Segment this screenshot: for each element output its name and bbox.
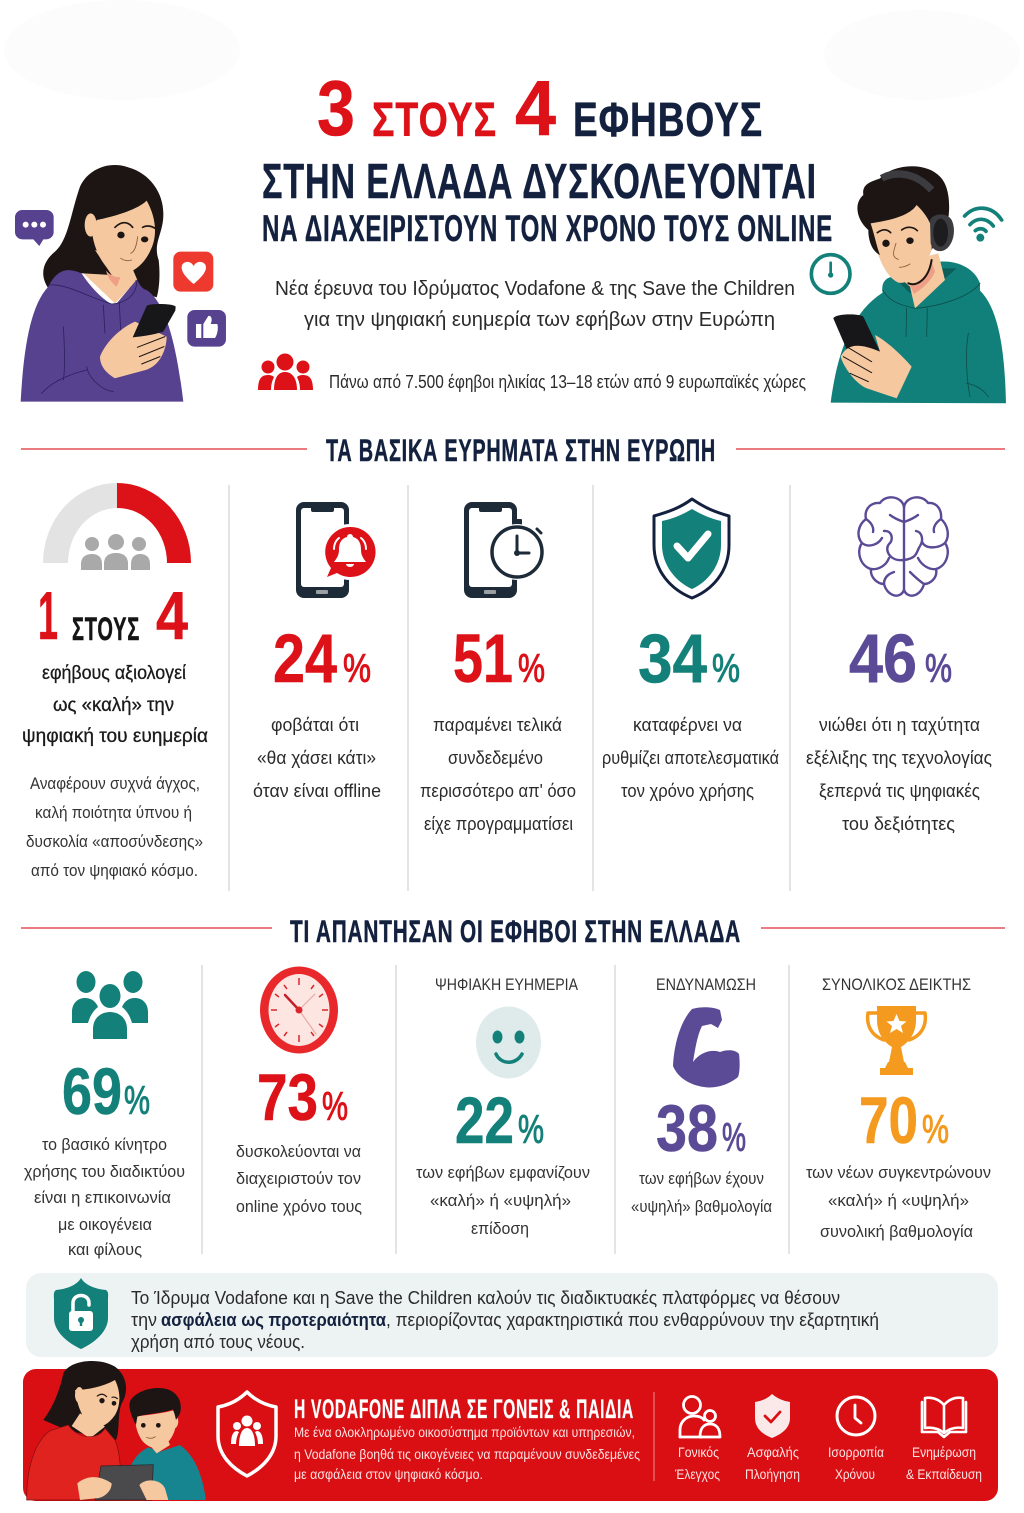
stat: 51 percent: 51	[453, 620, 513, 697]
item: safe browsing	[745, 1394, 800, 1482]
panel: 73 percent	[236, 966, 362, 1216]
panel: 46 percent	[806, 497, 992, 834]
heading: teens in Greece: ΤΙ ΑΠΑΝΤΗΣΑΝ ΟΙ ΕΦΗΒΟΙ ΣΤΗΝ ΕΛΛΑΔΑ	[290, 913, 741, 949]
text: 73 percent: διαχειριστούν τον	[236, 1169, 361, 1188]
text: 69 percent: και φίλους	[68, 1240, 142, 1259]
text: 46 percent: νιώθει ότι η ταχύτητα	[819, 715, 980, 735]
text: 1 in 4 lead: ως «καλή» την	[53, 695, 174, 716]
item: parental control: Έλεγχος	[674, 1466, 720, 1482]
title: 3	[317, 64, 355, 152]
text: 38 percent: «υψηλή» βαθμολογία	[631, 1197, 772, 1216]
text: 22 percent: «καλή» ή «υψηλή»	[430, 1191, 571, 1210]
icon: trophy	[868, 1006, 925, 1075]
text: 1 in 4 lead: εφήβους αξιολογεί	[42, 663, 187, 684]
panel: 69 percent	[24, 971, 185, 1259]
text: callout: ασφάλεια ως προτεραιότητα	[161, 1310, 386, 1330]
stat: 73 percent: %	[322, 1085, 348, 1129]
item: parental control: Γονικός	[678, 1444, 719, 1460]
callout: call to platforms	[26, 1273, 998, 1357]
icon: brain	[859, 497, 948, 596]
stat: 1 in 4	[38, 578, 188, 654]
text: 24 percent: φοβάται ότι	[271, 715, 359, 735]
text: 69 percent: χρήσης του διαδικτύου	[24, 1162, 185, 1181]
text: 24 percent	[253, 715, 381, 801]
text: 46 percent: ξεπερνά τις ψηφιακές	[819, 781, 980, 801]
stat: 34 percent: %	[712, 647, 740, 691]
text: 22 percent	[416, 1163, 590, 1238]
stat: 24 percent: 24	[273, 620, 337, 697]
icon: survey people	[258, 354, 313, 390]
stat: 46 percent: 46	[849, 620, 917, 697]
stat: 46 percent: %	[925, 647, 952, 691]
panel: 1 in 4	[22, 483, 208, 880]
gauge chart	[43, 483, 191, 570]
text: 1 in 4 details: δυσκολία «αποσύνδεσης»	[26, 832, 203, 851]
stat: 51 percent: %	[518, 647, 545, 691]
label: overall index: ΣΥΝΟΛΙΚΟΣ ΔΕΙΚΤΗΣ	[822, 975, 971, 994]
text: 1 in 4 details: καλή ποιότητα ύπνου ή	[35, 803, 192, 822]
text: banner body	[294, 1425, 640, 1482]
stat: 70 percent: 70	[859, 1083, 918, 1157]
heading: banner: Η VODAFONE ΔΙΠΛΑ ΣΕ ΓΟΝΕΙΣ & ΠΑΙΔΙΑ	[294, 1394, 634, 1424]
icon: muscle arm	[673, 1007, 740, 1087]
text: 51 percent: περισσότερο απ' όσο	[420, 781, 576, 801]
text: 51 percent	[420, 715, 576, 834]
title: ΕΦΗΒΟΥΣ	[573, 94, 763, 147]
stat: 1 in 4: ΣΤΟΥΣ	[72, 611, 140, 647]
text: callout	[131, 1288, 879, 1352]
text: 69 percent: με οικογένεια	[58, 1215, 152, 1234]
panel: 51 percent	[420, 502, 576, 834]
icon: phone with bell	[296, 502, 378, 598]
icon: lock shield	[54, 1278, 108, 1349]
label: digital wellbeing: ΨΗΦΙΑΚΗ ΕΥΗΜΕΡΙΑ	[435, 975, 579, 994]
panel: 24 percent	[253, 502, 381, 801]
text: 69 percent: το βασικό κίνητρο	[42, 1135, 167, 1154]
text: 69 percent	[24, 1135, 185, 1259]
item: time balance	[828, 1397, 884, 1482]
subtitle: Νέα έρευνα του Ιδρύματος Vodafone & της Save the Children	[275, 278, 795, 300]
text: banner body: η Vodafone βοηθά τις οικογένειες να παραμένουν συνδεδεμένες	[294, 1447, 640, 1462]
stat: 70 percent: %	[922, 1108, 949, 1152]
item: education	[906, 1398, 982, 1482]
icon: phone with stopwatch	[464, 502, 545, 598]
stat: 38 percent: %	[722, 1116, 746, 1160]
text: banner body: με ασφάλεια στον ψηφιακό κόσμο.	[294, 1467, 483, 1482]
title: 4	[515, 64, 556, 152]
item: education: & Εκπαίδευση	[906, 1466, 982, 1482]
text: banner body: Με ένα ολοκληρωμένο οικοσύστημα προϊόντων και υπηρεσιών,	[294, 1425, 635, 1440]
panel: 34 percent	[602, 499, 779, 801]
text: callout: , περιορίζοντας χαρακτηριστικά που ενθαρρύνουν την εξαρτητική	[386, 1310, 879, 1330]
text: 1 in 4 details	[26, 774, 203, 880]
heading: findings in Europe: ΤΑ ΒΑΣΙΚΑ ΕΥΡΗΜΑΤΑ ΣΤΗΝ ΕΥΡΩΠΗ	[326, 432, 716, 468]
stat: 22 percent: %	[518, 1108, 544, 1152]
subtitle: για την ψηφιακή ευημερία των εφήβων στην Ευρώπη	[304, 309, 775, 331]
stat: 38 percent: 38	[656, 1091, 718, 1165]
item: time balance: Χρόνου	[835, 1466, 875, 1482]
text: 34 percent: ρυθμίζει αποτελεσματικά	[602, 748, 779, 768]
text: 46 percent: εξέλιξης της τεχνολογίας	[806, 748, 992, 768]
text: 46 percent: του δεξιότητες	[842, 814, 955, 834]
item: safe browsing: Ασφαλής	[747, 1444, 799, 1460]
illustration: boy with headphones	[811, 166, 1006, 403]
text: 70 percent: «καλή» ή «υψηλή»	[828, 1191, 969, 1210]
text: 46 percent	[806, 715, 992, 834]
text: 70 percent	[806, 1163, 991, 1241]
illustration: girl with phone	[15, 165, 226, 402]
text: 1 in 4 details: από τον ψηφιακό κόσμο.	[31, 861, 198, 880]
text: 1 in 4 lead	[22, 663, 208, 747]
text: 38 percent	[631, 1169, 772, 1216]
icon: clock	[260, 966, 338, 1054]
text: 51 percent: συνδεδεμένο	[448, 748, 543, 768]
stat: 1 in 4: 1	[38, 578, 58, 654]
title	[262, 64, 833, 249]
panel: overall index	[806, 975, 991, 1241]
panel: Vodafone banner	[23, 1361, 998, 1501]
label: empowerment: ΕΝΔΥΝΑΜΩΣΗ	[656, 975, 756, 994]
panel: digital wellbeing	[416, 975, 590, 1238]
title: ΣΤΟΥΣ	[372, 94, 497, 147]
stat: 69 percent: 69	[62, 1054, 122, 1128]
text: callout: την	[131, 1310, 157, 1330]
text: 34 percent	[602, 715, 779, 801]
survey sample text: Πάνω από 7.500 έφηβοι ηλικίας 13–18 ετών από 9 ευρωπαϊκές χώρες	[329, 372, 806, 392]
icon: family shield	[218, 1392, 276, 1476]
panel: empowerment	[631, 975, 772, 1216]
stat: 24 percent: %	[343, 647, 371, 691]
text: 70 percent: συνολική βαθμολογία	[820, 1222, 973, 1241]
item: time balance: Ισορροπία	[828, 1444, 884, 1460]
text: 34 percent: τον χρόνο χρήσης	[621, 781, 754, 801]
text: 24 percent: όταν είναι offline	[253, 781, 381, 801]
stat: 69 percent: %	[124, 1079, 150, 1123]
text: 1 in 4 details: Αναφέρουν συχνά άγχος,	[30, 774, 200, 793]
stat: 1 in 4: 4	[156, 578, 188, 654]
text: 22 percent: επίδοση	[471, 1219, 529, 1238]
icon: smiley	[476, 1006, 541, 1078]
subtitle	[275, 278, 795, 331]
item: education: Ενημέρωση	[912, 1444, 976, 1460]
icon: teal people	[72, 971, 148, 1039]
text: 24 percent: «θα χάσει κάτι»	[257, 748, 376, 768]
text: 69 percent: είναι η επικοινωνία	[34, 1188, 171, 1207]
text: callout: χρήση από τους νέους.	[131, 1332, 305, 1352]
stat: 22 percent: 22	[455, 1083, 514, 1157]
text: 73 percent: online χρόνο τους	[236, 1197, 362, 1216]
icon: shield check	[654, 499, 729, 598]
text: 34 percent: καταφέρνει να	[633, 715, 742, 735]
text: 73 percent	[236, 1142, 362, 1216]
text: 73 percent: δυσκολεύονται να	[236, 1142, 361, 1161]
stat: 34 percent: 34	[638, 620, 707, 697]
text: 70 percent: των νέων συγκεντρώνουν	[806, 1163, 991, 1182]
item: parental control	[674, 1396, 720, 1482]
text: 38 percent: των εφήβων έχουν	[639, 1169, 764, 1188]
text: 51 percent: είχε προγραμματίσει	[424, 814, 573, 834]
text: 51 percent: παραμένει τελικά	[433, 715, 562, 735]
text: 22 percent: των εφήβων εμφανίζουν	[416, 1163, 590, 1182]
illustration: mother and child	[27, 1361, 206, 1500]
text: callout: Το Ίδρυμα Vodafone και η Save the Children καλούν τις διαδικτυακές πλατφόρμες να θέσουν	[131, 1288, 840, 1308]
stat: 73 percent: 73	[257, 1060, 318, 1134]
text: 1 in 4 lead: ψηφιακή του ευημερία	[22, 726, 208, 747]
item: safe browsing: Πλοήγηση	[745, 1466, 800, 1482]
